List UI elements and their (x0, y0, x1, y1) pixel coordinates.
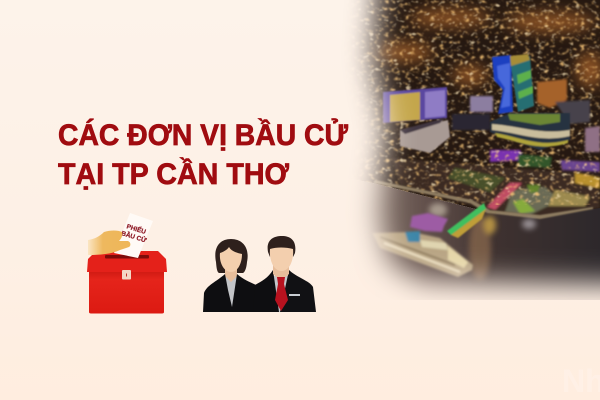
green bridge (447, 203, 486, 238)
city ground (330, 0, 600, 218)
mid buildings (452, 79, 600, 152)
white building (400, 118, 450, 153)
photo: Can Tho city at night (330, 0, 600, 300)
hand (88, 230, 130, 255)
ballot text (120, 220, 151, 245)
slot (105, 255, 149, 258)
river bank (373, 180, 593, 219)
clasp (122, 270, 131, 280)
moored boat (372, 213, 473, 277)
river (359, 181, 600, 300)
title (58, 118, 349, 191)
riverside road and park (392, 150, 600, 217)
city lights (330, 0, 600, 205)
icon: ballot box with hand (87, 213, 167, 314)
woman (203, 239, 256, 312)
purple hotel (383, 87, 447, 123)
man (253, 236, 316, 312)
title line 1: CÁC ĐƠN VỊ BẦU CỬ (58, 118, 349, 152)
water reflections (429, 203, 536, 280)
ballot text: PHIẾU (125, 221, 148, 236)
blue and green towers (492, 54, 534, 114)
round podium building (490, 113, 570, 150)
title line 2: TẠI TP CẦN THƠ (58, 157, 290, 191)
ballot paper (114, 213, 153, 258)
warm city glow (377, 9, 600, 88)
box lid (87, 251, 167, 272)
box body (89, 271, 164, 314)
ballot text: BẦU CỬ (120, 227, 149, 245)
icon: two candidates (203, 236, 316, 312)
